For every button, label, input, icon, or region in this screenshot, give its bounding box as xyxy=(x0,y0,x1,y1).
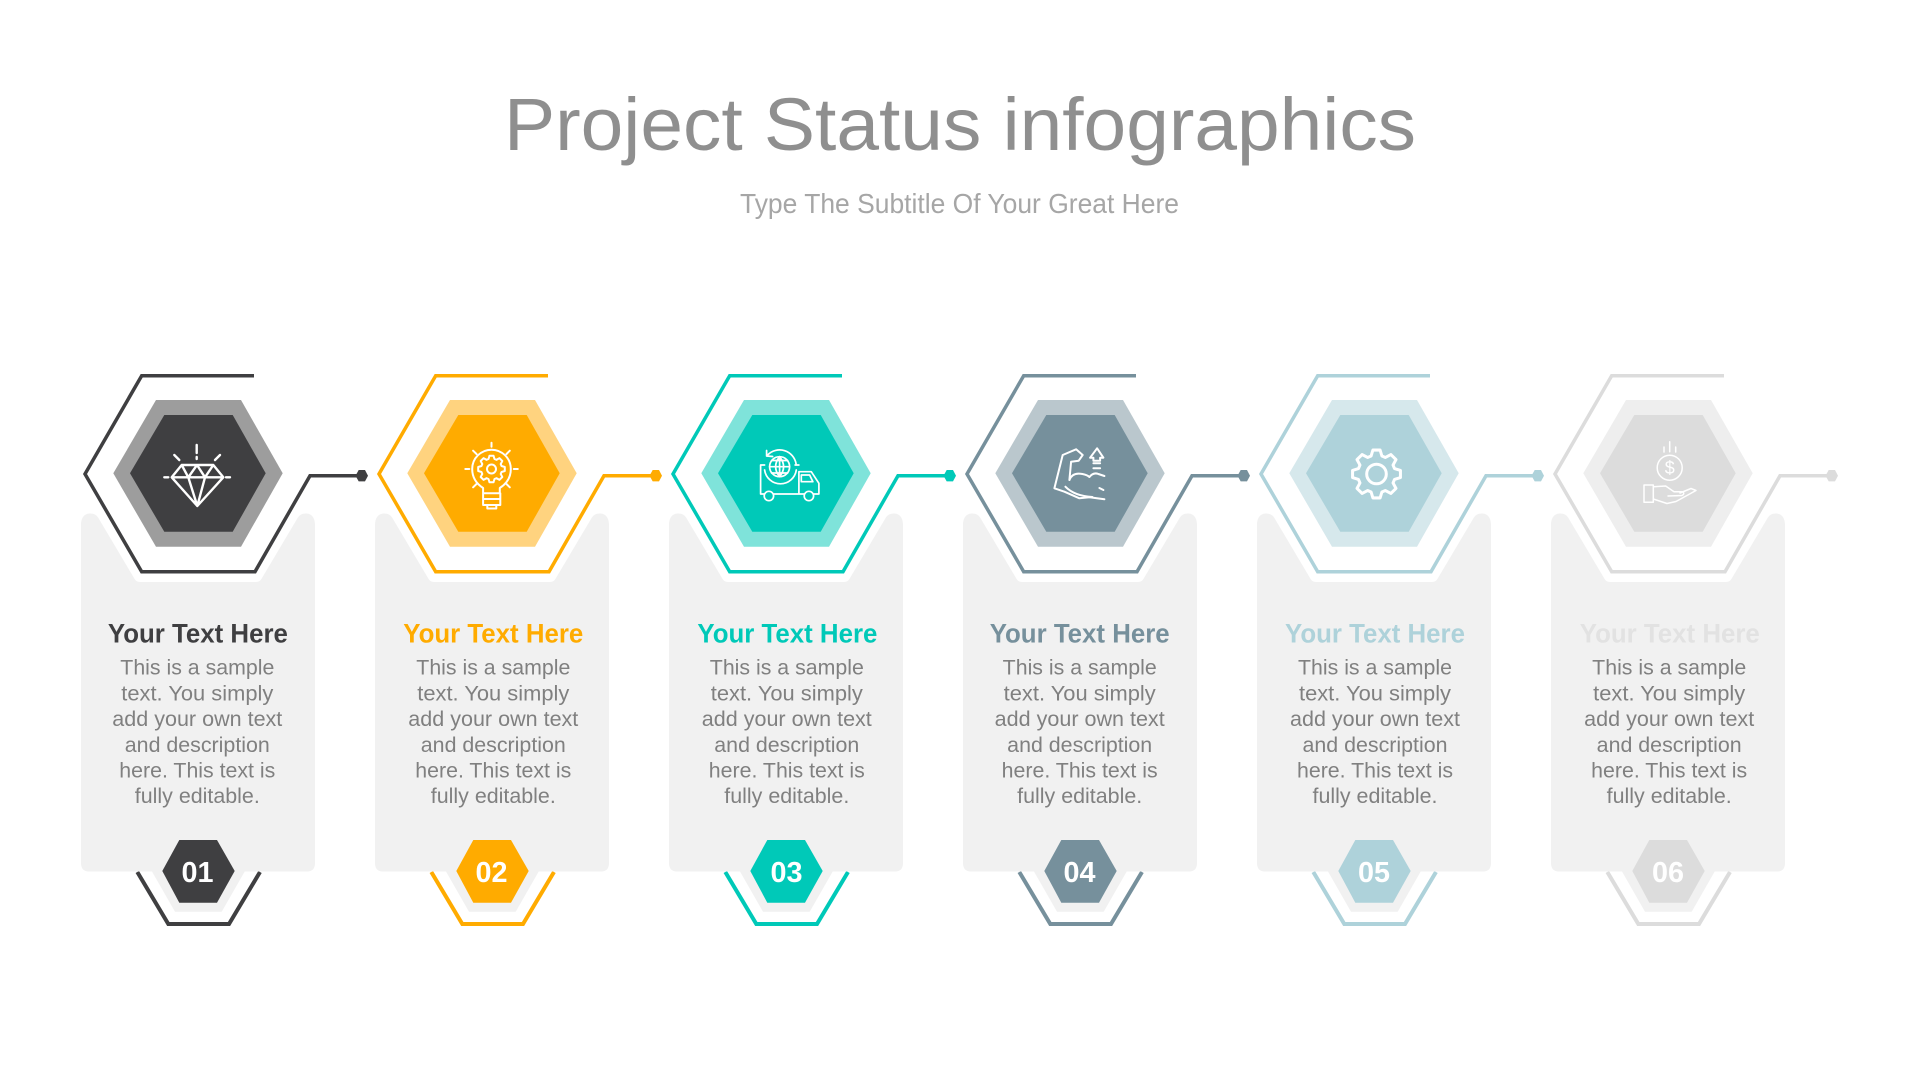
heading: Your Text Here xyxy=(108,619,288,649)
number badge xyxy=(1338,840,1411,903)
description: here. This text is xyxy=(1591,760,1747,782)
main hexagon xyxy=(1600,415,1736,532)
outer hexagon line with connector xyxy=(673,376,946,572)
card xyxy=(375,514,609,872)
description xyxy=(1290,656,1460,808)
icon: flexed arm with up arrow xyxy=(1054,448,1104,499)
number badge xyxy=(1044,840,1117,903)
number badge xyxy=(162,840,235,903)
title: Project Status infographics xyxy=(504,83,1416,166)
description: here. This text is xyxy=(709,760,865,782)
card xyxy=(963,514,1197,872)
description: This is a sample xyxy=(1298,656,1452,680)
connector dot xyxy=(1238,470,1250,481)
light hexagon xyxy=(113,400,283,547)
icon: hand with coin: $ xyxy=(1665,458,1675,478)
description: This is a sample xyxy=(416,656,570,680)
icon: delivery truck with globe xyxy=(761,450,819,501)
description: text. You simply xyxy=(711,682,863,706)
description: and description xyxy=(714,734,859,757)
bottom light hexagon xyxy=(446,871,539,912)
panel: step 04 xyxy=(963,376,1250,924)
description: and description xyxy=(1007,734,1152,757)
connector dot xyxy=(650,470,662,481)
panel: step 01 xyxy=(81,376,368,924)
description: fully editable. xyxy=(724,785,849,808)
description: fully editable. xyxy=(431,785,556,808)
bottom outline hexagon xyxy=(1313,872,1436,924)
panel: step 05 xyxy=(1257,376,1544,924)
bottom outline hexagon xyxy=(137,872,260,924)
description: add your own text xyxy=(702,708,872,731)
number badge xyxy=(750,840,823,903)
number badge xyxy=(456,840,529,903)
light hexagon xyxy=(1583,400,1753,547)
bottom light hexagon xyxy=(1034,871,1127,912)
number badge xyxy=(1632,840,1705,903)
number badge: 03 xyxy=(770,857,802,889)
bottom outline hexagon xyxy=(725,872,848,924)
light hexagon xyxy=(995,400,1165,547)
description: text. You simply xyxy=(121,682,274,706)
description: text. You simply xyxy=(1004,682,1156,706)
description: text. You simply xyxy=(1299,682,1452,706)
icon: hand with coin xyxy=(1644,442,1696,504)
description: add your own text xyxy=(995,708,1165,731)
description: fully editable. xyxy=(135,785,260,808)
bottom outline hexagon xyxy=(1019,872,1142,924)
description: and description xyxy=(1302,734,1448,757)
icon: gear xyxy=(1353,450,1400,498)
connector dot xyxy=(356,470,368,481)
description: text. You simply xyxy=(417,682,570,706)
bottom light hexagon xyxy=(1328,871,1421,912)
panel: step 02 xyxy=(375,376,662,924)
light hexagon xyxy=(1289,400,1459,547)
outer hexagon line with connector xyxy=(379,376,652,572)
panel: step 03 xyxy=(669,376,956,924)
main hexagon xyxy=(1306,415,1442,532)
description xyxy=(702,656,872,808)
main hexagon xyxy=(130,415,266,532)
bottom outline hexagon xyxy=(1607,872,1730,924)
description: and description xyxy=(125,734,270,757)
outer hexagon line with connector xyxy=(85,376,358,572)
icon: light bulb with gear xyxy=(465,443,518,508)
description: fully editable. xyxy=(1312,785,1438,808)
description: add your own text xyxy=(1290,708,1460,731)
card xyxy=(81,514,315,872)
bottom light hexagon xyxy=(152,871,245,912)
heading: Your Text Here xyxy=(990,619,1170,649)
light hexagon xyxy=(407,400,577,547)
description: here. This text is xyxy=(119,760,275,782)
description: add your own text xyxy=(1584,708,1754,731)
number badge: 06 xyxy=(1652,857,1684,889)
outer hexagon line with connector xyxy=(1555,376,1828,572)
main hexagon xyxy=(718,415,854,532)
description: and description xyxy=(421,734,566,757)
number badge: 01 xyxy=(182,857,214,889)
subtitle: Type The Subtitle Of Your Great Here xyxy=(740,188,1179,219)
description: add your own text xyxy=(408,708,578,731)
bottom light hexagon xyxy=(740,871,833,912)
bottom light hexagon xyxy=(1622,871,1715,912)
main hexagon xyxy=(424,415,560,532)
number badge: 05 xyxy=(1358,857,1390,889)
description: This is a sample xyxy=(1003,656,1157,680)
card xyxy=(1551,514,1785,872)
number badge: 02 xyxy=(476,857,508,889)
description: fully editable. xyxy=(1607,785,1732,808)
number badge: 04 xyxy=(1064,857,1096,889)
icon: diamond xyxy=(164,445,230,506)
description: This is a sample xyxy=(710,656,864,680)
description xyxy=(408,656,578,808)
heading: Your Text Here xyxy=(697,619,877,649)
connector dot xyxy=(1532,470,1544,481)
heading: Your Text Here xyxy=(1580,619,1760,649)
panel: step 06 xyxy=(1551,376,1838,924)
description: fully editable. xyxy=(1017,785,1142,808)
description: here. This text is xyxy=(1297,760,1453,782)
heading: Your Text Here xyxy=(403,619,583,649)
outer hexagon line with connector xyxy=(967,376,1240,572)
description: here. This text is xyxy=(415,760,571,782)
outer hexagon line with connector xyxy=(1261,376,1534,572)
description: and description xyxy=(1597,734,1742,757)
bottom outline hexagon xyxy=(431,872,554,924)
description xyxy=(112,656,282,808)
card xyxy=(1257,514,1491,872)
card xyxy=(669,514,903,872)
description: add your own text xyxy=(112,708,282,731)
heading: Your Text Here xyxy=(1285,619,1465,649)
light hexagon xyxy=(701,400,871,547)
description: here. This text is xyxy=(1002,760,1158,782)
description xyxy=(995,656,1165,808)
description: This is a sample xyxy=(1592,656,1746,680)
main hexagon xyxy=(1012,415,1148,532)
description: text. You simply xyxy=(1593,682,1746,706)
connector dot xyxy=(1826,470,1838,481)
description xyxy=(1584,656,1754,808)
connector dot xyxy=(944,470,956,481)
description: This is a sample xyxy=(120,656,274,680)
